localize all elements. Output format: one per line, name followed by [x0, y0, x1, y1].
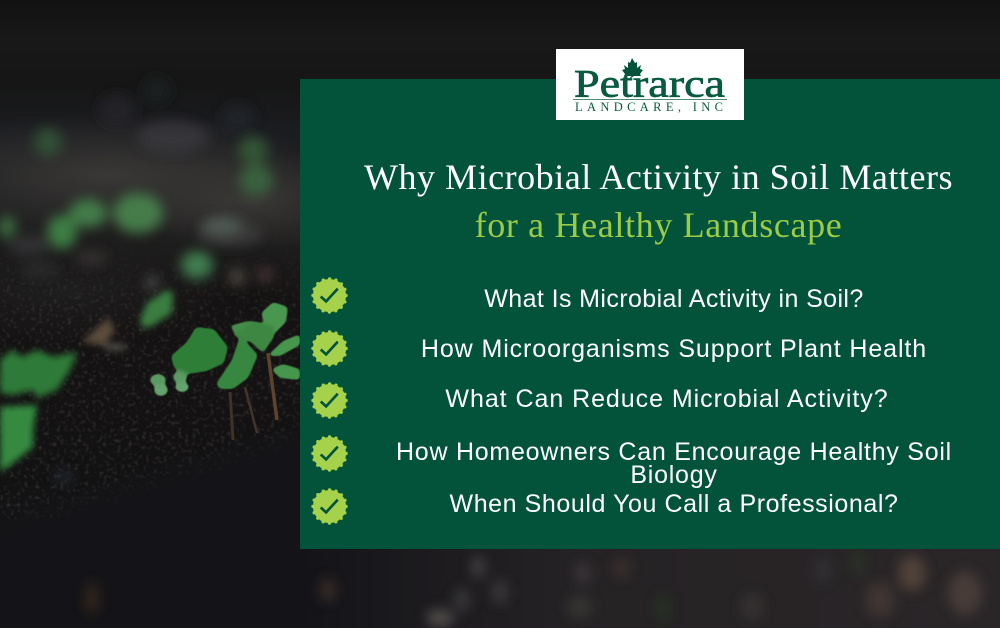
logo tagline: LANDCARE, INC: [575, 100, 723, 114]
green content panel: [300, 79, 1000, 549]
seedling stems: [230, 353, 277, 440]
blurred background seedlings: [0, 128, 273, 279]
in-focus seedlings: [150, 302, 300, 396]
icon: maple leaf: [622, 58, 643, 80]
check icon 1: [311, 277, 348, 314]
check icon 3: [311, 382, 348, 419]
check icon 2: [311, 330, 348, 367]
list item 5: When Should You Call a Professional?: [450, 490, 898, 518]
blurred background pebbles: [8, 76, 262, 278]
check icon 5: [311, 488, 348, 525]
check icon 4: [311, 435, 348, 472]
list item 4: Biology: [630, 461, 718, 489]
logo wordmark: Petrarca: [574, 62, 725, 106]
title line 2: for a Healthy Landscape: [475, 205, 842, 245]
logo card: [556, 49, 744, 120]
list item 2: How Microorganisms Support Plant Health: [421, 335, 927, 363]
blurred foreground specks: [55, 268, 982, 627]
blurred soil strip below panel: [300, 549, 1000, 628]
title line 1: Why Microbial Activity in Soil Matters: [364, 157, 953, 197]
list item 4: [396, 438, 952, 489]
list item 3: What Can Reduce Microbial Activity?: [445, 385, 889, 413]
list item 1: What Is Microbial Activity in Soil?: [484, 285, 864, 313]
list item 4: How Homeowners Can Encourage Healthy Soil: [396, 438, 952, 466]
soil texture: [0, 272, 300, 520]
out-of-focus seedlings: [0, 290, 173, 472]
